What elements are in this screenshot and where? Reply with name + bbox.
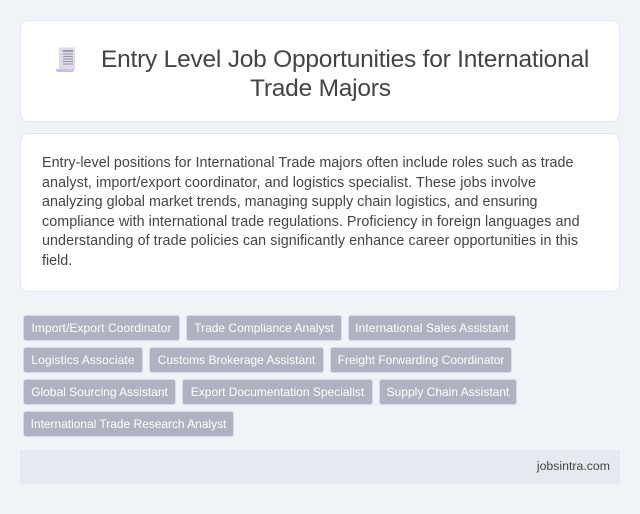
tag: Global Sourcing Assistant: Global Sourcing Assistant bbox=[31, 385, 168, 399]
tag: Logistics Associate: Logistics Associate bbox=[31, 353, 135, 367]
tag: Global Sourcing Assistant bbox=[23, 379, 176, 405]
text: description line 6: field. bbox=[42, 253, 72, 269]
heading: title line 1: Entry Level Job Opportunities for International bbox=[101, 46, 589, 73]
tag: Freight Forwarding Coordinator bbox=[330, 347, 512, 373]
tag: Import/Export Coordinator bbox=[23, 315, 180, 341]
text: description line 5: understanding of trade policies can significantly enhance career opportunities in this bbox=[42, 233, 578, 249]
text: description line 2: analyst, import/export coordinator, and logistics specialist. These jobs involve bbox=[42, 175, 536, 191]
tag: International Trade Research Analyst: International Trade Research Analyst bbox=[31, 417, 226, 431]
text: description line 1: Entry-level positions for International Trade majors often include roles such as trade bbox=[42, 155, 573, 171]
text: footer site name: jobsintra.com bbox=[537, 459, 610, 473]
tag: International Sales Assistant: International Sales Assistant bbox=[355, 321, 509, 335]
tag: International Trade Research Analyst bbox=[23, 411, 234, 437]
text: description line 3: analyzing global market trends, managing supply chain logistics, and ensuring bbox=[42, 194, 538, 210]
tag: International Sales Assistant bbox=[348, 315, 516, 341]
heading: title line 2: Trade Majors bbox=[250, 75, 391, 102]
tag: Trade Compliance Analyst: Trade Compliance Analyst bbox=[194, 321, 334, 335]
icon: paper receipt bbox=[56, 47, 75, 72]
tag: Logistics Associate bbox=[23, 347, 143, 373]
panel: header card bbox=[20, 20, 620, 122]
tag: Import/Export Coordinator: Import/Export Coordinator bbox=[31, 321, 172, 335]
tag: Export Documentation Specialist: Export Documentation Specialist bbox=[191, 385, 364, 399]
tag: Customs Brokerage Assistant bbox=[149, 347, 324, 373]
tag: Supply Chain Assistant bbox=[379, 379, 517, 405]
tag: Export Documentation Specialist bbox=[182, 379, 373, 405]
tag: Supply Chain Assistant: Supply Chain Assistant bbox=[387, 385, 509, 399]
text: description line 4: compliance with international trade regulations. Proficiency in foreign languages and bbox=[42, 214, 580, 230]
tag: Customs Brokerage Assistant: Customs Brokerage Assistant bbox=[158, 353, 315, 367]
panel: description card bbox=[20, 133, 620, 292]
tag: Trade Compliance Analyst bbox=[186, 315, 342, 341]
tag: Freight Forwarding Coordinator: Freight Forwarding Coordinator bbox=[338, 353, 504, 367]
footer bar bbox=[20, 450, 620, 484]
